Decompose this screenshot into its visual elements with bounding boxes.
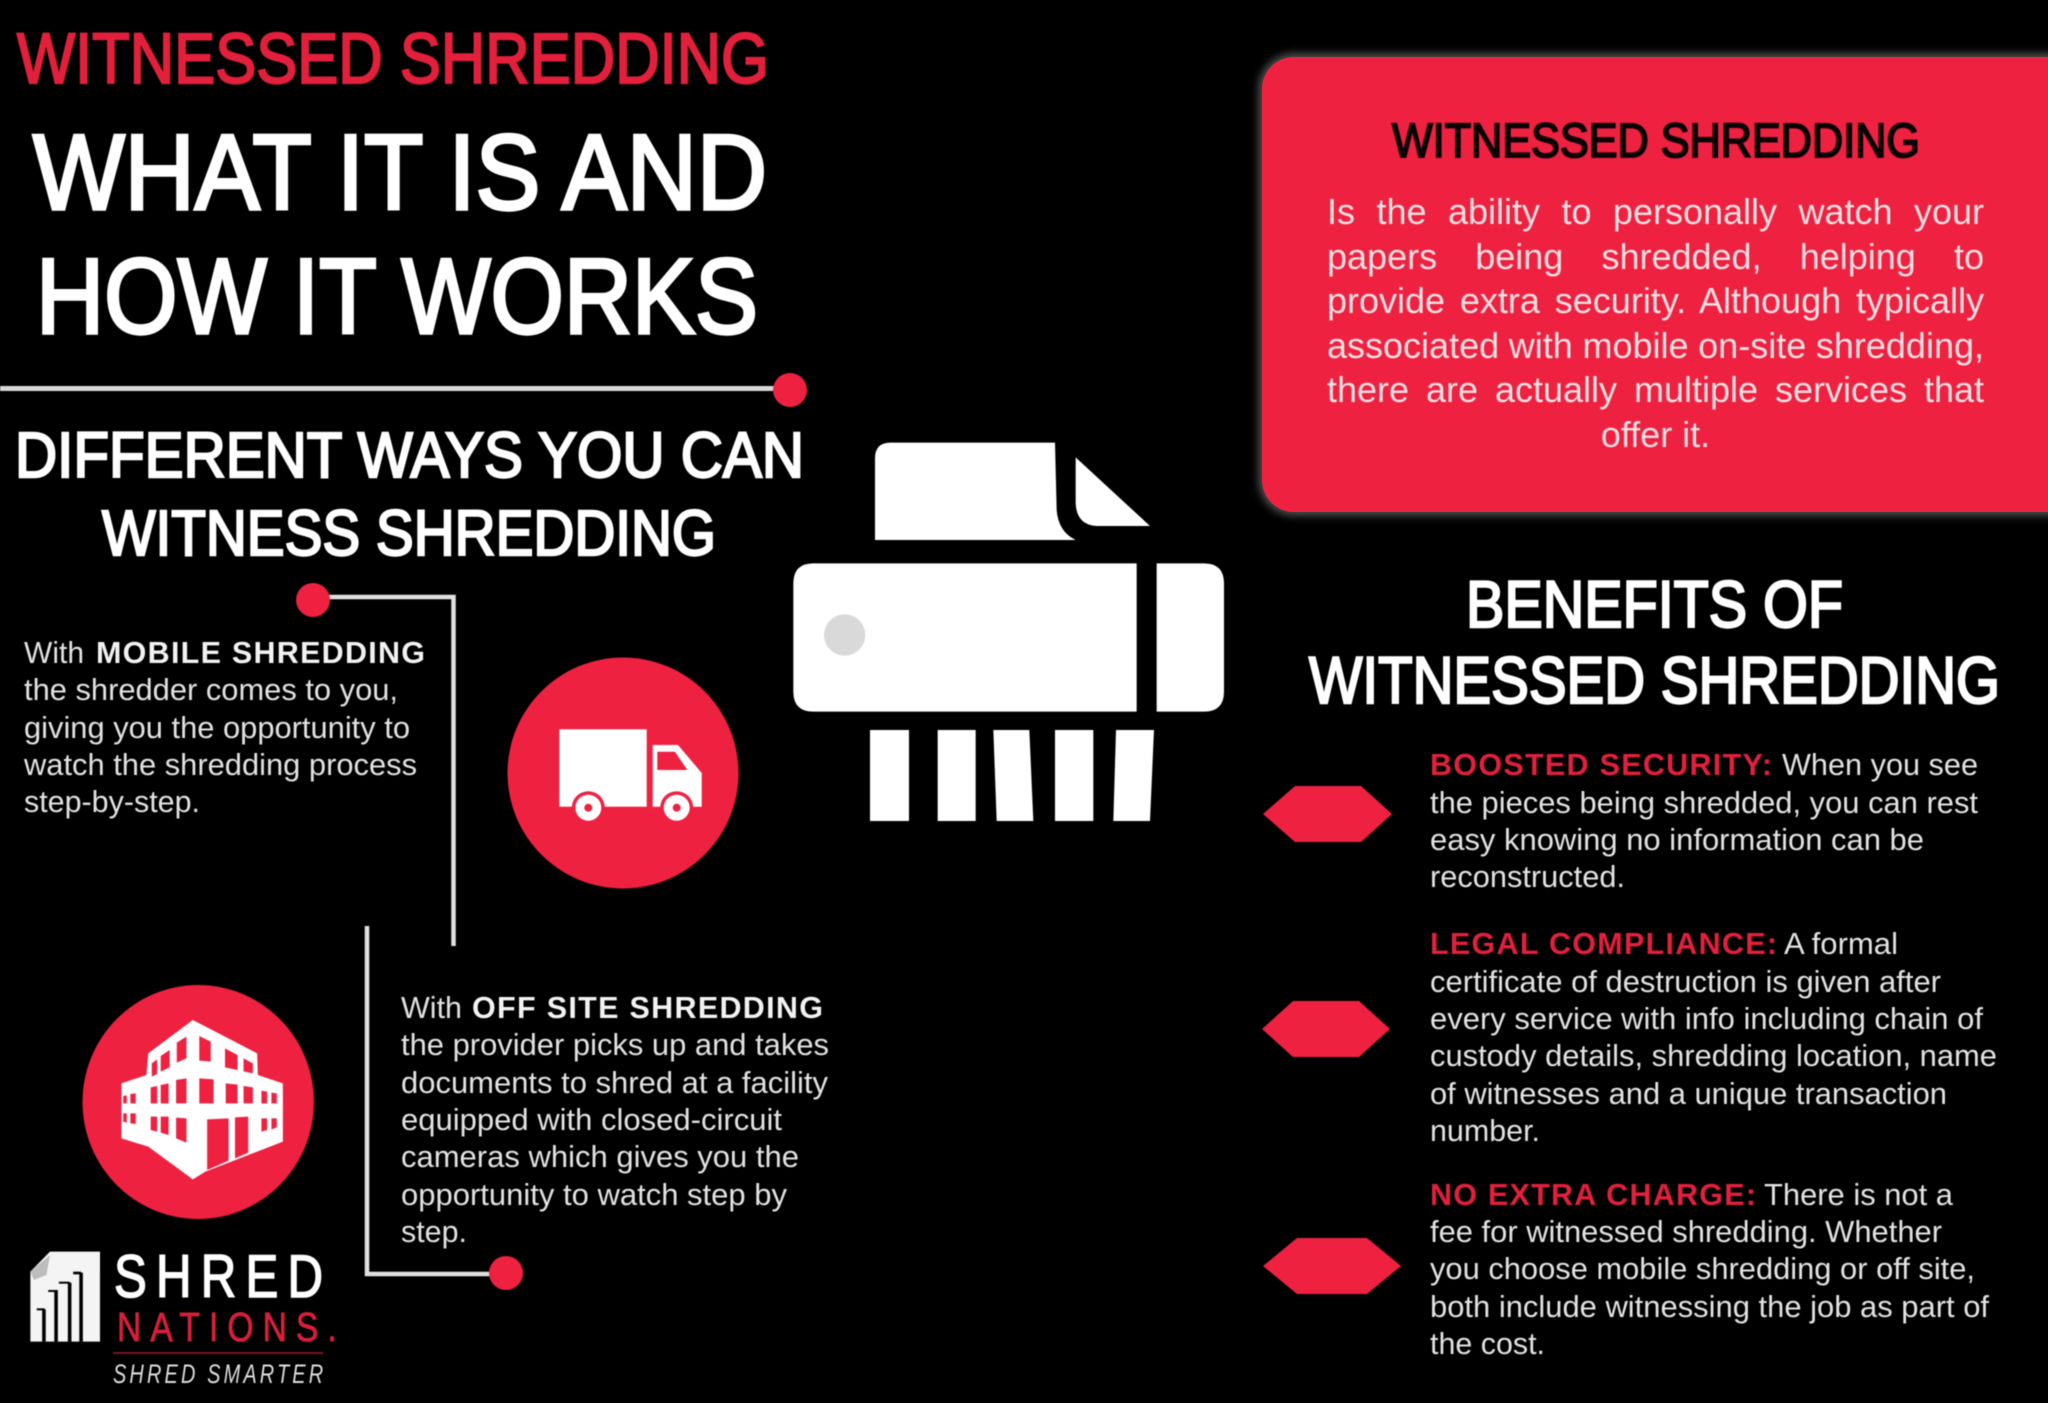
definition body text: provide extra security. Although typically — [1327, 280, 1984, 321]
definition body text: Is the ability to personally watch your — [1327, 191, 1984, 232]
benefit: no extra charge: both include witnessing the job as part of — [1430, 1290, 1990, 1324]
hexagon bullet 2 — [1262, 1001, 1390, 1057]
connector: mobile shredding — [296, 583, 454, 946]
shredded strips — [870, 730, 1154, 821]
benefit: no extra charge: fee for witnessed shredding. Whether — [1430, 1215, 1942, 1249]
subheading: different ways: WITNESS SHREDDING — [102, 497, 716, 569]
benefit: no extra charge: There is not a — [1764, 1178, 1953, 1212]
hexagon bullet 1 — [1263, 786, 1392, 842]
text: off site shredding: OFF SITE SHREDDING — [472, 991, 823, 1025]
benefit: legal compliance: LEGAL COMPLIANCE: — [1430, 927, 1777, 961]
connector: off site shredding — [367, 926, 523, 1290]
text: off site shredding: cameras which gives you the — [401, 1140, 799, 1174]
text: mobile shredding: giving you the opportunity to — [24, 711, 410, 745]
benefit: no extra charge: NO EXTRA CHARGE: — [1430, 1178, 1756, 1212]
benefit: legal compliance: A formal — [1784, 927, 1898, 961]
main title — [33, 112, 767, 356]
subheading: different ways: DIFFERENT WAYS YOU CAN — [15, 419, 804, 491]
main title: WHAT IT IS AND — [33, 112, 767, 232]
benefit: legal compliance: certificate of destruction is given after — [1430, 965, 1941, 999]
text: off site shredding: opportunity to watch step by — [401, 1178, 788, 1212]
hexagon bullet 3 — [1263, 1238, 1401, 1294]
text: mobile shredding: step-by-step. — [24, 785, 200, 819]
logo mark — [30, 1252, 100, 1342]
icon: truck in red circle — [508, 658, 738, 888]
definition body text — [1326, 191, 1984, 455]
text: off site shredding: documents to shred at a facility — [401, 1066, 829, 1100]
text: off site shredding: equipped with closed-circuit — [401, 1103, 783, 1137]
text: mobile shredding: MOBILE SHREDDING — [96, 636, 425, 670]
text: mobile shredding — [23, 636, 425, 819]
logo wordmark: SHRED SMARTER — [113, 1359, 323, 1390]
logo wordmark: SHRED — [114, 1242, 323, 1310]
logo wordmark: NATIONS. — [117, 1304, 337, 1350]
eyebrow title: WITNESSED SHREDDING — [17, 20, 769, 99]
benefit: boosted security: When you see — [1782, 748, 1978, 782]
benefit: legal compliance: number. — [1430, 1114, 1540, 1148]
panel: definition background — [1262, 57, 2048, 512]
benefit: boosted security: BOOSTED SECURITY: — [1430, 748, 1772, 782]
benefit: boosted security: reconstructed. — [1430, 860, 1625, 894]
text: off site shredding: With — [401, 991, 462, 1025]
benefit: boosted security: easy knowing no information can be — [1430, 823, 1924, 857]
benefit: legal compliance — [1430, 927, 1997, 1148]
shredder paper — [875, 443, 1150, 540]
heading: benefits: BENEFITS OF — [1466, 567, 1843, 641]
benefit: no extra charge: you choose mobile shredding or off site, — [1430, 1252, 1975, 1286]
definition body text: papers being shredded, helping to — [1327, 236, 1984, 277]
text: off site shredding — [401, 991, 829, 1249]
heading: benefits — [1309, 567, 2000, 717]
icon: building in red circle — [82, 985, 314, 1219]
main title: HOW IT WORKS — [36, 236, 758, 356]
definition body text: offer it. — [1601, 414, 1710, 455]
text: mobile shredding: With — [24, 636, 84, 670]
benefit: legal compliance: of witnesses and a unique transaction — [1430, 1077, 1947, 1111]
benefit: legal compliance: every service with info including chain of — [1430, 1002, 1984, 1036]
icon: shredder — [793, 443, 1224, 821]
benefit: legal compliance: custody details, shredding location, name — [1430, 1039, 1997, 1073]
logo: Shred Nations — [30, 1242, 337, 1390]
text: off site shredding: step. — [401, 1215, 467, 1249]
benefit: no extra charge: the cost. — [1430, 1327, 1545, 1361]
text: off site shredding: the provider picks up and takes — [401, 1028, 829, 1062]
benefit: no extra charge — [1430, 1178, 1990, 1361]
shredder body — [793, 563, 1224, 712]
text: mobile shredding: watch the shredding process — [23, 748, 417, 782]
benefit: boosted security: the pieces being shredded, you can rest — [1430, 786, 1979, 820]
definition heading: WITNESSED SHREDDING — [1392, 115, 1920, 168]
definition body text: associated with mobile on-site shredding, — [1327, 325, 1984, 366]
subheading: different ways — [15, 419, 804, 569]
text: mobile shredding: the shredder comes to you, — [24, 673, 398, 707]
title divider with dot — [0, 373, 807, 407]
benefit: boosted security — [1430, 748, 1979, 894]
logo wordmark — [113, 1242, 337, 1390]
definition body text: there are actually multiple services that — [1327, 369, 1984, 410]
